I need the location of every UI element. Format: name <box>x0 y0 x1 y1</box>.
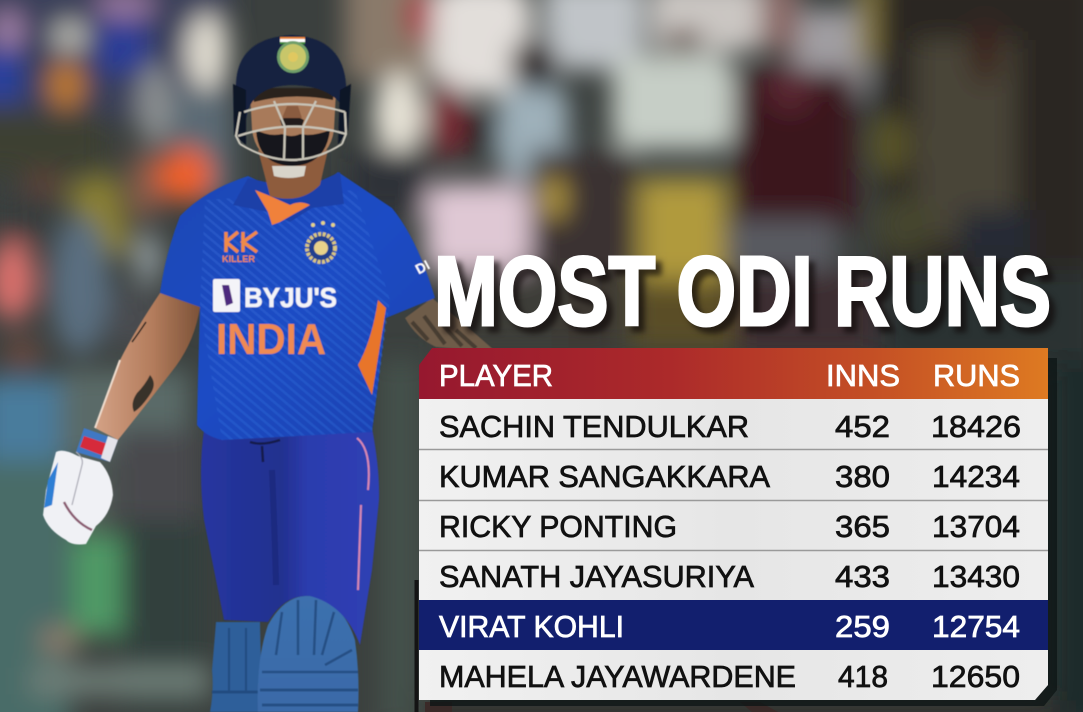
BCCI crest with stars <box>307 221 335 262</box>
row: Sachin Tendulkar: SACHIN TENDULKAR <box>439 409 749 444</box>
kit maker logo <box>222 232 257 264</box>
row: Virat Kohli highlighted: 12754 <box>932 609 1020 644</box>
row: Mahela Jayawardene: MAHELA JAYAWARDENE <box>439 659 796 694</box>
bat handle behind table <box>414 580 418 712</box>
jersey <box>160 172 435 440</box>
row: Mahela Jayawardene <box>419 650 1048 700</box>
row: Sanath Jayasuriya: SANATH JAYASURIYA <box>439 559 754 594</box>
row: Virat Kohli highlighted <box>419 600 1048 650</box>
row: Mahela Jayawardene: 12650 <box>931 659 1020 694</box>
row: Kumar Sangakkara: 14234 <box>932 459 1020 494</box>
table: most ODI runs <box>419 348 1048 700</box>
right forearm with tattoo <box>405 298 494 350</box>
bat and shoes detail below table <box>425 702 778 712</box>
table header row <box>419 348 1048 399</box>
row: Ricky Ponting: 365 <box>835 509 890 544</box>
shin pads <box>210 596 359 712</box>
jersey text: INDIA: INDIA <box>216 315 326 364</box>
table header row: PLAYER <box>439 358 553 393</box>
row: Sachin Tendulkar: 452 <box>835 409 890 444</box>
row: Sanath Jayasuriya: 433 <box>835 559 890 594</box>
row: Mahela Jayawardene: 418 <box>838 659 888 694</box>
batting glove <box>43 428 118 544</box>
sponsor: BYJU'S <box>213 279 337 313</box>
row: Sachin Tendulkar: 18426 <box>931 409 1021 444</box>
row: Virat Kohli highlighted: 259 <box>835 609 890 644</box>
row: Sachin Tendulkar <box>419 399 1048 449</box>
sponsor: BYJU'S: BYJU'S <box>244 282 337 313</box>
head and helmet <box>233 35 351 178</box>
sleeve sponsor: DI <box>413 257 432 277</box>
row: Kumar Sangakkara <box>419 450 1048 500</box>
row: Ricky Ponting: RICKY PONTING <box>439 509 677 544</box>
neck <box>258 150 328 199</box>
row: Sanath Jayasuriya <box>419 551 1048 600</box>
row: Ricky Ponting: 13704 <box>932 509 1020 544</box>
helmet face grille <box>236 101 346 160</box>
kit maker logo: KILLER <box>222 254 256 264</box>
player: batsman in India kit <box>43 35 494 712</box>
table header row: RUNS <box>933 358 1020 393</box>
row: Kumar Sangakkara: 380 <box>835 459 890 494</box>
row: Virat Kohli highlighted: VIRAT KOHLI <box>439 609 624 644</box>
left arm <box>95 293 200 440</box>
table drop shadow <box>430 358 1057 706</box>
shorts <box>201 428 379 645</box>
table header row: INNS <box>826 358 900 393</box>
row: Sanath Jayasuriya: 13430 <box>932 559 1020 594</box>
row: Kumar Sangakkara: KUMAR SANGAKKARA <box>439 459 770 494</box>
row: Ricky Ponting <box>419 501 1048 550</box>
